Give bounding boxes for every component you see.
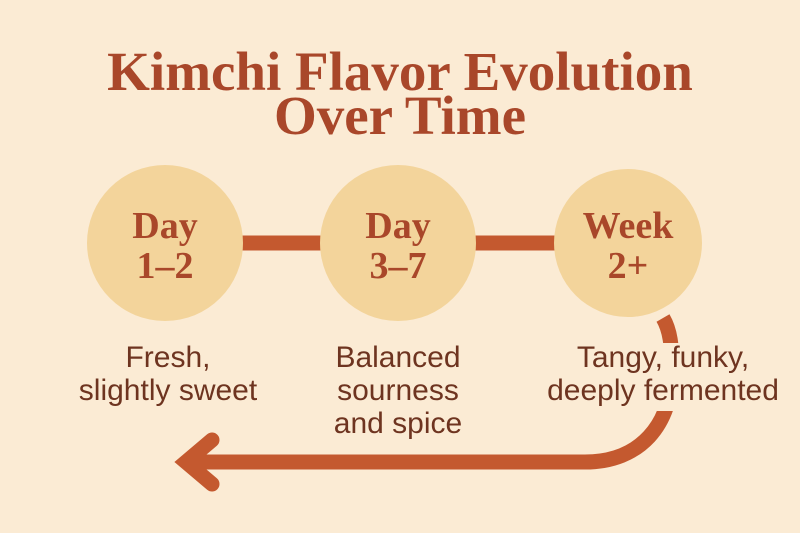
description 1: slightly sweet [79, 374, 257, 407]
stage 2: 3–7 [370, 245, 426, 287]
description 2: sourness [337, 374, 459, 407]
stage 3: 2+ [608, 245, 648, 287]
description 2 [334, 341, 462, 440]
title: Kimchi Flavor Evolution [107, 41, 693, 102]
stage 1 [87, 165, 243, 321]
description 3 [547, 341, 779, 407]
stage 2 [320, 165, 476, 321]
description 3: deeply fermented [547, 374, 779, 407]
title: Over Time [274, 85, 526, 146]
description 3: Tangy, funky, [577, 341, 749, 374]
description 1: Fresh, [125, 341, 211, 374]
description 2: Balanced [335, 341, 461, 374]
stage 2: Day [365, 205, 431, 247]
description 1 [79, 341, 257, 407]
description 2: and spice [334, 407, 462, 440]
stage 1: 1–2 [136, 245, 194, 287]
title [107, 41, 693, 146]
stage 1: Day [132, 205, 198, 247]
stage 3: Week [583, 205, 674, 247]
connector lines [185, 243, 672, 484]
stage 3 [554, 169, 702, 317]
